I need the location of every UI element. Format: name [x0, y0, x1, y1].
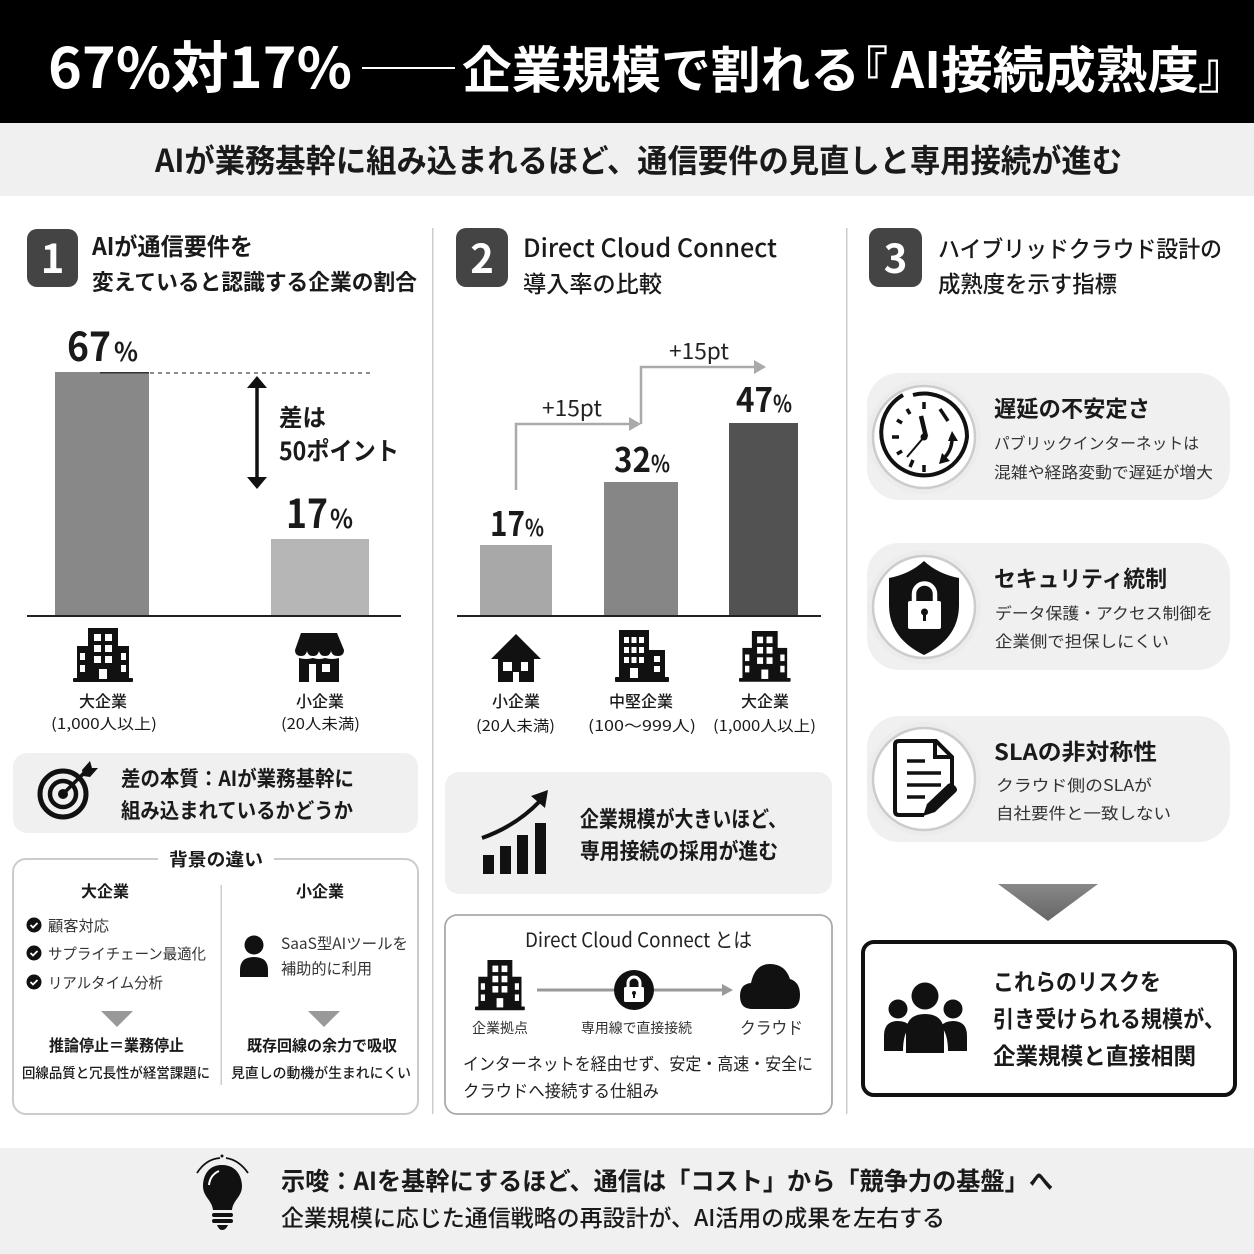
header band with title: AI接続成熟度	[890, 31, 1199, 103]
arrow: down triangle	[998, 884, 1098, 921]
icon: document with pen	[867, 722, 981, 836]
labels: company sizes: (1,000人以上)	[713, 715, 816, 736]
label: small company: (20人未満)	[281, 713, 360, 734]
conclusion box: 引き受けられる規模が、	[993, 1000, 1225, 1034]
callout: larger companies adopt more	[445, 772, 832, 894]
panel 3: hybrid cloud maturity indicators	[863, 227, 1235, 1095]
icon: small shop	[295, 633, 344, 682]
header band with title: 67%対17%	[48, 24, 352, 105]
labels: company sizes: 中堅企業	[609, 688, 673, 712]
small company column: SaaS型AIツールを	[281, 932, 408, 954]
panel: what is Direct Cloud Connect: Direct Cloud Connect とは	[525, 924, 752, 953]
section 2 heading	[456, 227, 777, 299]
labels: company sizes: 大企業	[741, 688, 789, 712]
bar chart: 67% vs 17%: %	[330, 499, 353, 536]
bar chart: adoption by company size	[457, 373, 821, 617]
section 3 heading: ハイブリッドクラウド設計の	[938, 230, 1222, 264]
panel: what is Direct Cloud Connect: インターネットを経由せず、安定・高速・安全に	[463, 1050, 813, 1075]
arrow: 50 point gap	[247, 376, 399, 489]
heading: background differences: 背景の違い	[169, 846, 263, 872]
conclusion box: これらのリスクを	[993, 963, 1161, 997]
card: SLA asymmetry: SLAの非対称性	[994, 735, 1157, 767]
icon: rising chart	[482, 790, 548, 874]
labels: company sizes: 小企業	[492, 688, 540, 712]
callout: larger companies adopt more: 企業規模が大きいほど、	[580, 802, 787, 834]
bar chart: adoption by company size: 32	[614, 433, 651, 482]
panel: what is Direct Cloud Connect: クラウドへ接続する仕組み	[463, 1077, 659, 1102]
callout: larger companies adopt more: 専用接続の採用が進む	[580, 834, 778, 866]
bar chart: adoption by company size: %	[651, 445, 670, 479]
panel: what is Direct Cloud Connect: 専用線で直接接続	[581, 1018, 692, 1038]
bar chart: 67% vs 17%: 17	[286, 482, 328, 540]
labels: company sizes: (20人未満)	[476, 715, 555, 736]
label: small company: 小企業	[296, 688, 344, 712]
icon: mid-size company	[615, 630, 669, 682]
footer: implication: 企業規模に応じた通信戦略の再設計が、AI活用の成果を左右する	[281, 1199, 945, 1233]
arrow: +15pt step 1: +15pt	[542, 391, 602, 423]
arrow: +15pt step 2: +15pt	[669, 334, 729, 366]
section 1 heading: AIが通信要件を	[91, 227, 253, 262]
label: large company	[51, 688, 157, 734]
section 3 heading: 3	[884, 227, 907, 285]
icon: group of people	[884, 982, 967, 1053]
large company column: 大企業	[81, 878, 129, 902]
small company column: 見直しの動機が生まれにくい	[231, 1063, 411, 1083]
small company column: 小企業	[296, 878, 344, 902]
card: SLA asymmetry	[867, 716, 1230, 842]
card: security governance: データ保護・アクセス制御を	[995, 600, 1213, 624]
panel: background differences	[13, 846, 418, 1114]
small company column: 既存回線の余力で吸収	[247, 1034, 397, 1056]
large company column: 回線品質と冗長性が経営課題に	[22, 1063, 210, 1083]
icon: company site	[475, 960, 525, 1010]
panel: what is Direct Cloud Connect	[445, 915, 832, 1114]
label: large company: (1,000人以上)	[51, 713, 157, 734]
icon: large company	[73, 628, 133, 682]
card: latency instability: 遅延の不安定さ	[994, 392, 1150, 424]
large company column: 推論停止＝業務停止	[49, 1032, 184, 1056]
bar chart: adoption by company size: %	[773, 385, 792, 419]
icon: light bulb	[197, 1154, 248, 1230]
bar chart: adoption by company size: 47	[736, 373, 773, 422]
icon: clock	[867, 380, 981, 494]
header band with title	[0, 0, 1254, 123]
callout: essence of the difference	[13, 753, 418, 833]
subtitle band	[0, 123, 1254, 196]
card: security governance: セキュリティ統制	[994, 562, 1167, 594]
card: SLA asymmetry: クラウド側のSLAが	[996, 772, 1152, 796]
callout: essence of the difference: 差の本質：AIが業務基幹に	[121, 763, 354, 793]
card: latency instability: パブリックインターネットは	[994, 430, 1199, 454]
section 3 heading	[869, 227, 1222, 299]
labels: company sizes	[476, 688, 816, 736]
card: security governance: 企業側で担保しにくい	[995, 628, 1169, 652]
subtitle band: AIが業務基幹に組み込まれるほど、通信要件の見直しと専用接続が進む	[154, 136, 1122, 182]
panel: what is Direct Cloud Connect: 企業拠点	[472, 1018, 528, 1038]
small company column	[231, 878, 411, 1083]
header band with title: 『	[838, 31, 888, 103]
footer: implication	[0, 1148, 1254, 1254]
arrow: dedicated line	[537, 970, 733, 1010]
icon: cloud	[740, 964, 800, 1009]
card: SLA asymmetry: 自社要件と一致しない	[996, 800, 1171, 824]
section 1 heading: 変えていると認識する企業の割合	[92, 265, 417, 297]
section 3 heading: 成熟度を示す指標	[938, 265, 1117, 299]
icon: target	[40, 761, 98, 817]
large company column: サプライチェーン最適化	[48, 943, 206, 964]
large company column: リアルタイム分析	[48, 972, 163, 993]
icon: large company	[739, 631, 791, 682]
panel: what is Direct Cloud Connect: クラウド	[740, 1014, 803, 1039]
panel 2: direct cloud connect adoption	[445, 227, 832, 1114]
header band with title: 企業規模で割れる	[462, 31, 860, 103]
bar chart: adoption by company size: 17	[490, 497, 525, 546]
large company column	[22, 878, 210, 1083]
card: latency instability: 混雑や経路変動で遅延が増大	[994, 459, 1213, 483]
footer: implication: 示唆：AIを基幹にするほど、通信は「コスト」から「競争力の基盤」へ	[281, 1162, 1053, 1198]
arrow: +15pt step 2	[641, 334, 766, 424]
bar chart: 67% vs 17%	[27, 315, 401, 617]
icon: person	[240, 936, 268, 977]
icon: house	[491, 634, 541, 682]
label: small company	[281, 688, 360, 734]
section 1 heading	[27, 227, 417, 297]
arrow: 50 point gap: 50ポイント	[279, 432, 399, 468]
large company column: 顧客対応	[48, 915, 109, 936]
arrow: +15pt step 1	[516, 391, 641, 490]
callout: essence of the difference: 組み込まれているかどうか	[121, 795, 353, 825]
panel 1: recognition gap	[13, 227, 418, 1114]
label: large company: 大企業	[79, 688, 127, 712]
arrow: 50 point gap: 差は	[279, 398, 326, 433]
section 2 heading: 2	[470, 227, 494, 285]
bar chart: 67% vs 17%: %	[114, 332, 138, 369]
conclusion box	[863, 942, 1235, 1095]
labels: company sizes: (100～999人)	[588, 715, 696, 736]
icon: shield with lock	[867, 550, 981, 664]
bar chart: adoption by company size: %	[525, 509, 544, 543]
card: security governance	[867, 543, 1230, 670]
bar chart: 67% vs 17%: 67	[67, 315, 111, 373]
small company column: 補助的に利用	[281, 957, 372, 979]
section 2 heading: Direct Cloud Connect	[523, 229, 777, 265]
section 1 heading: 1	[41, 227, 64, 285]
header band with title: 』	[1198, 31, 1248, 103]
card: latency instability	[867, 373, 1230, 500]
section 2 heading: 導入率の比較	[523, 265, 662, 299]
conclusion box: 企業規模と直接相関	[993, 1037, 1196, 1071]
